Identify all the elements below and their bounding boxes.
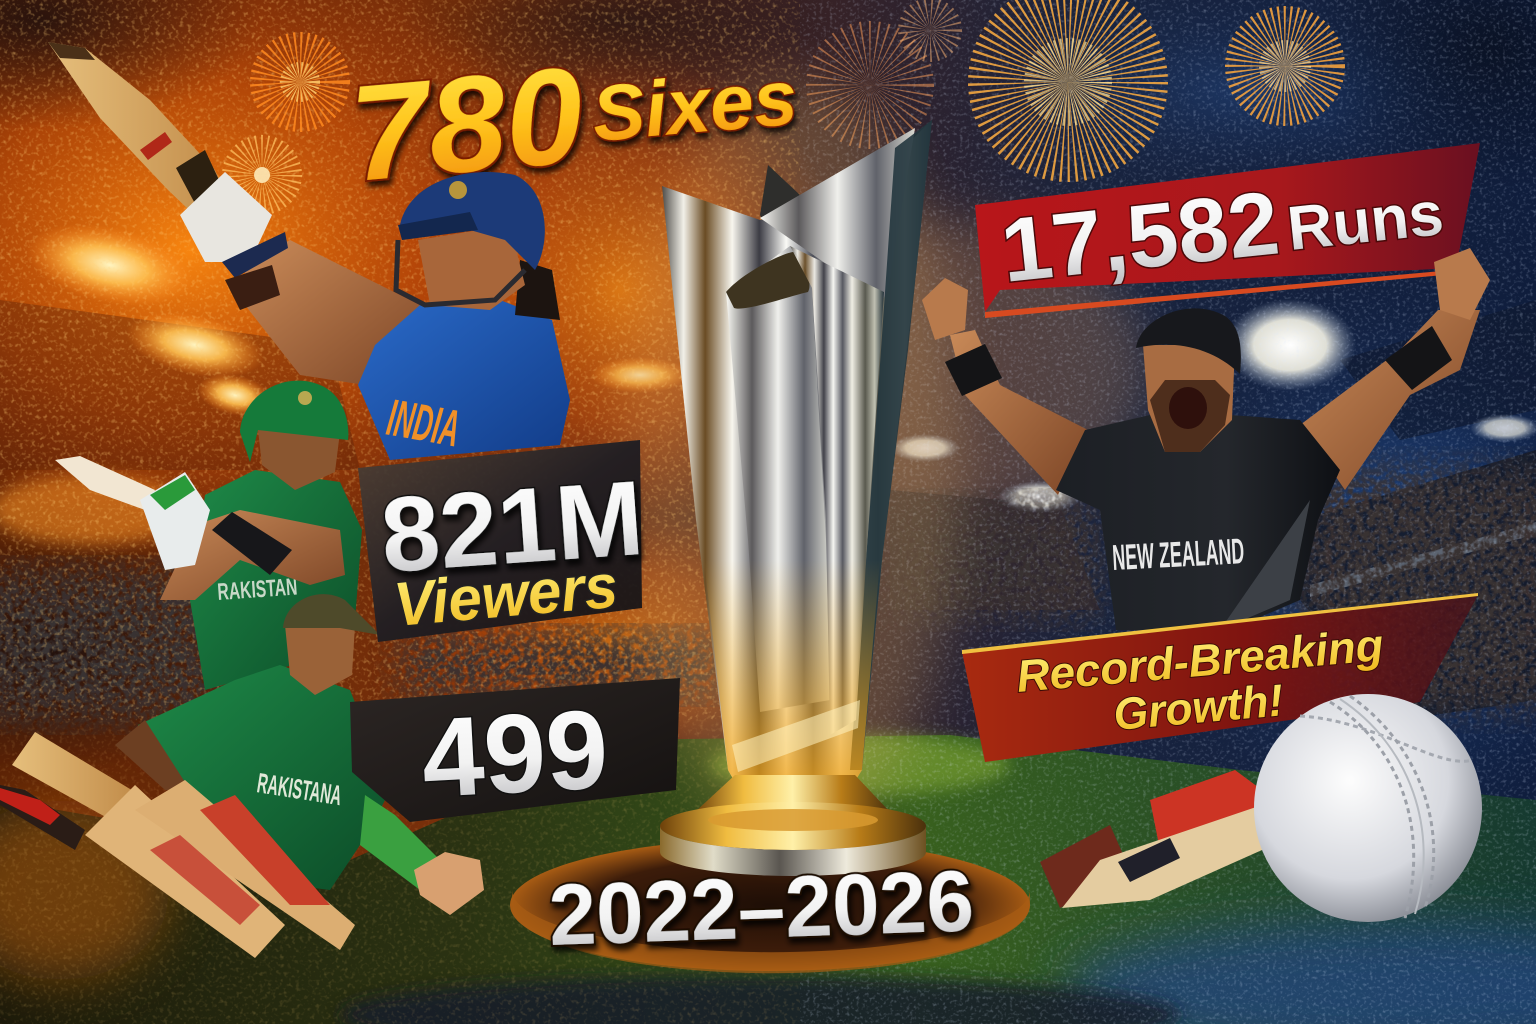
face [258,430,340,490]
helmet [400,172,545,270]
stat plate: 499 [350,678,680,822]
player: India batter: INDIA [383,389,464,458]
banner: Record-Breaking Growth: Growth! [1111,674,1285,740]
player: New Zealand celebrating [922,248,1490,630]
banner: 17,582 Runs: Runs [1284,179,1447,264]
trophy [620,80,960,876]
banner: 17,582 Runs: 17,582 [997,173,1284,302]
gloves [140,472,210,570]
player: Pakistan fielder: RAKISTANA [255,767,344,811]
beard [1150,380,1230,452]
raised arm right [1300,310,1480,490]
trophy main body [662,120,932,808]
trophy inner tube [726,246,830,712]
stat: 780 Sixes: 780 [345,38,589,210]
bats bottom left [0,732,355,958]
left arm [115,720,190,790]
firework: centre burst [838,14,946,117]
arm [160,510,345,600]
stat panel: 821M Viewers: Viewers [391,552,620,640]
raised arm left [950,330,1088,495]
stat panel: 821M Viewers [358,440,647,642]
helmet [240,381,348,462]
stadium stands left [0,210,690,545]
fist [414,852,484,915]
player: Pakistan batter [55,381,362,690]
jersey [1056,415,1340,630]
plinth under trophy [510,839,1030,973]
banner: Record-Breaking Growth: Record-Breaking [1014,619,1385,702]
arm [245,240,430,385]
gloves [180,172,272,262]
crowd textures [0,470,1536,720]
hair [515,260,560,320]
trophy base [660,775,926,876]
firework: top right small [1255,36,1315,96]
player: New Zealand celebrating: NEW ZEALAND [1111,530,1245,578]
cricket ball [1254,694,1482,922]
forearm [360,795,440,890]
face [418,225,525,310]
grass field [0,735,1536,1024]
fireworks [242,14,1315,195]
open mouth [1169,387,1207,429]
cap [1136,308,1241,374]
cap [283,594,380,635]
stat plate: 499: 499 [419,686,611,821]
face [285,625,355,695]
stat panel: 821M Viewers: 821M [377,459,647,595]
player: Pakistan fielder [115,594,484,915]
stat: 780 Sixes: Sixes [589,52,800,158]
face [1143,345,1235,452]
trophy right blade [760,128,915,320]
player: Pakistan batter: RAKISTAN [217,573,298,606]
banner: 17,582 Runs [975,143,1480,318]
trophy gold reflection [704,560,880,808]
player: India batter [48,42,570,460]
spark texture [0,0,800,720]
jersey [358,300,570,460]
jersey [138,665,390,890]
firework: top left [275,57,325,107]
banner: Record-Breaking Growth [962,593,1478,762]
firework: by bat [242,155,282,195]
jersey [190,470,362,690]
white bat [55,456,155,510]
date range: 2022–2026 [547,853,975,964]
bat raised [48,42,232,228]
firework: top right large [1018,32,1118,132]
trophy back blades [760,122,930,300]
stat: 780 Sixes [345,19,803,210]
bat bottom right [1040,770,1262,908]
stadium stands right [890,299,1536,720]
